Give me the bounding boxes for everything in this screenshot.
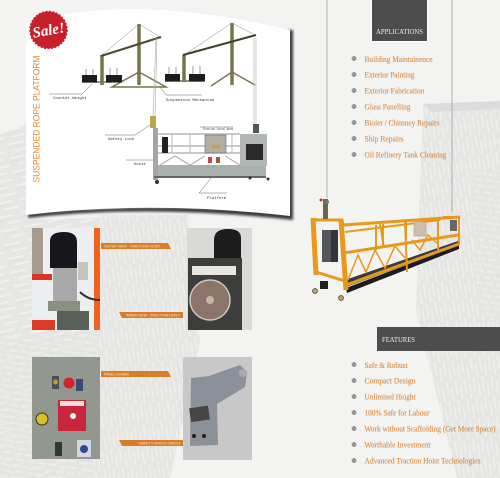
ribbon: panel board: PANEL BOARD: [104, 372, 130, 376]
suspension frame 1: [82, 24, 166, 87]
suspension frame 2: [165, 23, 256, 86]
list: features: Compact Design: [364, 376, 416, 386]
list: features: [352, 361, 496, 466]
ribbon: outer view: OUTER VIEW - TRACTION HOIST: [104, 244, 161, 248]
building: left background texture: [0, 124, 200, 478]
ribbon: safety magic catch: [119, 440, 183, 446]
leader lines: [49, 84, 233, 193]
vertical suspension ropes: [327, 0, 452, 212]
heading: applications: APPLICATIONS: [376, 28, 423, 36]
list: applications: Oil Refinery Tank Cleaning: [364, 150, 446, 160]
list: features: Unlimited Height: [364, 392, 416, 402]
diagram labels: Counter-Weight: [53, 96, 87, 101]
list: features: Safe & Robust: [364, 361, 408, 370]
photo: safety magic catch: [183, 357, 252, 460]
ribbon: outer view: [101, 243, 171, 249]
heading: features: FEATURES: [382, 336, 415, 344]
heading: applications: [371, 0, 428, 42]
sale badge: Sale!: [31, 20, 66, 42]
diagram labels: Electrical Control Borad: [203, 127, 233, 132]
diagram labels: Suspension Mechanism: [166, 98, 215, 103]
list: applications: [352, 55, 446, 160]
list: applications: Exterior Painting: [364, 70, 414, 80]
diagram labels: Platform: [207, 196, 227, 201]
ribbon: safety magic catch: SAFETY MAGIC CATCH: [139, 442, 180, 446]
list: applications: Bioler / Chimney Repairs: [364, 118, 440, 128]
panel shadow: [28, 30, 293, 220]
ribbon: inner view: INNER VIEW - TRACTION HOIST: [126, 314, 181, 318]
panel: suspended rope platform diagram: [26, 9, 293, 220]
orange suspended platform: [312, 198, 460, 300]
building: right background texture: [416, 101, 500, 478]
machine drawing: [49, 23, 270, 193]
photo: panel board: [32, 357, 100, 459]
hanging ropes: [153, 38, 256, 124]
heading: features: [377, 327, 500, 351]
list: features: 100% Safe for Labour: [364, 408, 430, 418]
sale badge: [30, 12, 67, 48]
suspended platform: [150, 116, 270, 184]
diagram labels: [53, 96, 233, 201]
ribbon: panel board: [101, 371, 171, 377]
white panel: [26, 9, 290, 216]
list: applications: Glass Panelling: [364, 102, 410, 112]
diagram labels: Hoist: [134, 162, 146, 167]
list: applications: Exterior Fabrication: [364, 86, 424, 96]
list: features: Worthable Investment: [364, 440, 431, 450]
diagram labels: Safety Lock: [108, 137, 135, 142]
list: applications: Building Maintainence: [364, 55, 433, 64]
list: applications: Ship Repairs: [364, 134, 404, 144]
photo: inner view traction hoist: [187, 228, 252, 330]
ribbon: inner view: [119, 312, 183, 318]
list: features: Advanced Traction Hoist Technologies: [364, 456, 480, 466]
vertical title: SUSPENDED ROPE PLATFORM: [32, 55, 42, 182]
photo: outer view traction hoist: [32, 228, 100, 330]
